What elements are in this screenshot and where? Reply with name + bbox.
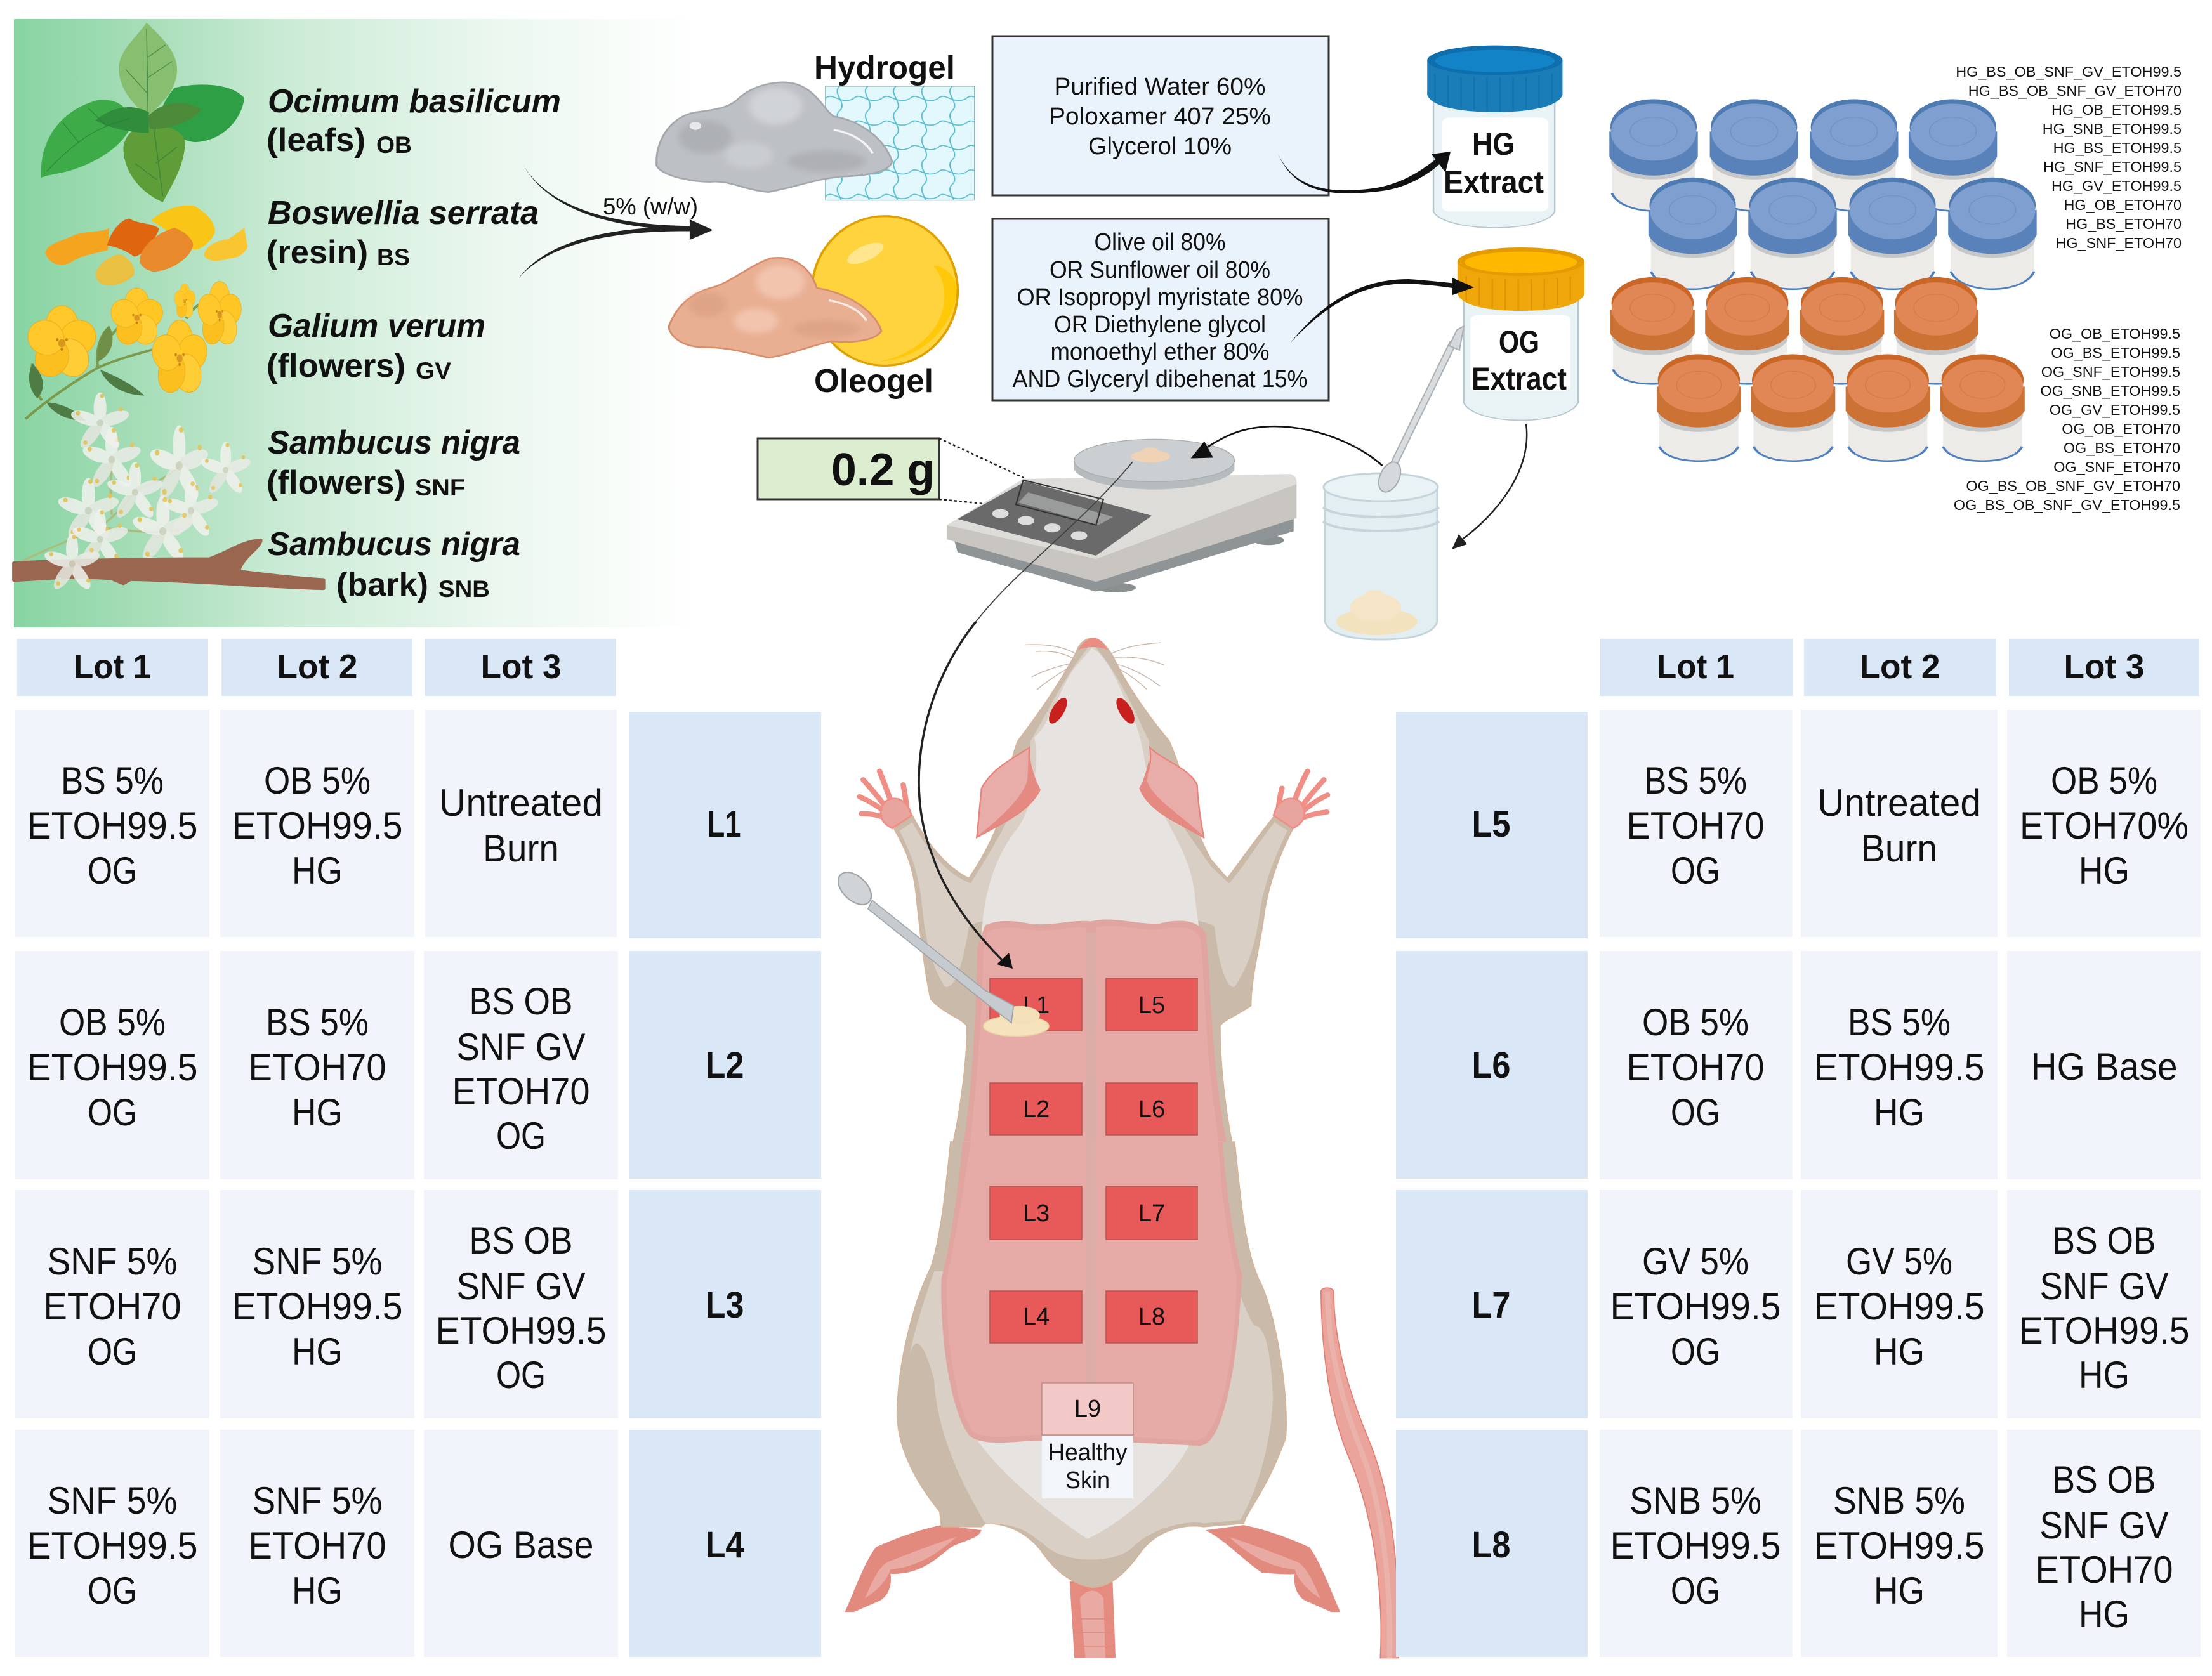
panel: plant sources gradient background	[14, 19, 699, 627]
text list: oleogel formulation codes: OG_BS_ETOH70	[2064, 440, 2180, 456]
header row right: Lot 2	[1859, 648, 1940, 686]
panel: oleogel composition box: OR Diethylene glycol	[1054, 311, 1266, 338]
header row left: Lot 3	[481, 648, 561, 686]
text list: hydrogel formulation codes: HG_SNF_ETOH70	[2056, 235, 2182, 251]
healthy skin site L9: Healthy	[1048, 1439, 1127, 1466]
row L6 right	[1396, 951, 2201, 1179]
arrow: OG jar to small jar	[1452, 424, 1527, 549]
row L4 left: OG Base	[448, 1524, 594, 1566]
site squares L1 to L8: L4	[1023, 1304, 1050, 1330]
row L8 right: ETOH99.5	[1610, 1524, 1781, 1567]
arrow: balance to rat L1 site	[919, 462, 1133, 969]
site squares L1 to L8	[990, 978, 1197, 1343]
label: Ocimum basilicum: (leafs)	[267, 122, 365, 159]
text list: oleogel formulation codes	[1954, 325, 2180, 513]
text list: hydrogel formulation codes: HG_BS_ETOH99.5	[2053, 140, 2182, 156]
row L1 left: Burn	[483, 827, 559, 870]
site squares L1 to L8: L7	[1138, 1200, 1165, 1227]
site squares L1 to L8: L2	[1023, 1096, 1050, 1123]
spatula and cream on L1	[832, 867, 1049, 1037]
row L6 right: HG	[1874, 1091, 1925, 1134]
icon: oleogel blob and oil drop	[669, 216, 958, 365]
healthy skin site L9	[1042, 1383, 1133, 1498]
label: Sambucus nigra flowers	[267, 424, 520, 501]
row L2 left: HG	[292, 1091, 343, 1134]
icon: HG extract jar: HG	[1472, 126, 1515, 162]
row L5 right: L5	[1472, 804, 1510, 845]
rat upper divider	[1086, 933, 1096, 1155]
row L3 left: SNF 5%	[253, 1240, 382, 1283]
row L5 right: Untreated	[1817, 782, 1981, 824]
row L3 left: BS OB	[470, 1219, 572, 1262]
row L5 right: ETOH70%	[2020, 804, 2189, 847]
row L5 right: HG	[2079, 849, 2130, 892]
label: Ocimum basilicum: OB	[376, 132, 412, 158]
row L3 left: OG	[88, 1330, 137, 1373]
row L6 right: BS 5%	[1848, 1001, 1951, 1044]
tail segment on the right	[1321, 1288, 1399, 1658]
label: Galium verum: Galium verum	[268, 308, 485, 344]
row L3 left: OG	[496, 1354, 546, 1396]
icon: sambucus nigra flowers	[14, 393, 252, 568]
text list: hydrogel formulation codes: HG_OB_ETOH99.5	[2051, 101, 2182, 118]
text list: hydrogel formulation codes: HG_GV_ETOH99.5	[2051, 178, 2182, 194]
row L7 right: OG	[1671, 1330, 1720, 1373]
label: Boswellia serrata: BS	[377, 244, 410, 270]
row L1 left: ETOH99.5	[27, 804, 198, 847]
row L8 right	[1396, 1430, 2201, 1657]
row L6 right: OB 5%	[1642, 1001, 1749, 1044]
site squares L1 to L8: L8	[1138, 1304, 1165, 1330]
label: Ocimum basilicum	[267, 83, 561, 159]
arrow: oleogel box to OG jar	[1290, 278, 1474, 343]
row L2 left: L2	[706, 1045, 744, 1086]
row L6 right: L6	[1472, 1045, 1510, 1086]
label: Boswellia serrata: Boswellia serrata	[268, 195, 539, 232]
row L2 left	[15, 951, 821, 1179]
label: Boswellia serrata: (resin)	[267, 234, 368, 271]
panel: hydrogel composition box	[992, 36, 1329, 195]
row L1 left: OG	[88, 849, 137, 892]
site squares L1 to L8: L1	[1023, 992, 1050, 1019]
arrow: jar to balance plate	[1191, 426, 1383, 466]
label: Galium verum: (flowers)	[267, 348, 405, 384]
icon: OG extract jar	[1458, 247, 1584, 420]
row L7 right: ETOH99.5	[1814, 1285, 1985, 1328]
row L4 left: ETOH99.5	[27, 1524, 198, 1567]
row L3 left	[15, 1190, 821, 1418]
panel: hydrogel composition box: Purified Water 60%	[1055, 74, 1265, 100]
text list: oleogel formulation codes: OG_OB_ETOH70	[2062, 421, 2180, 437]
row L8 right: HG	[2079, 1593, 2130, 1635]
panel: hydrogel composition box: Glycerol 10%	[1088, 133, 1232, 160]
row L4 left: OG	[88, 1569, 137, 1612]
header row right	[1600, 639, 2199, 696]
callout: 0.2 g readout	[758, 438, 1024, 507]
row L3 left: HG	[292, 1330, 343, 1373]
icon: HG extract jar	[1427, 46, 1562, 228]
icon: basil leaves	[41, 22, 244, 202]
row L8 right: SNB 5%	[1629, 1479, 1761, 1522]
icon: spatula in jar	[1374, 326, 1464, 495]
heading: Hydrogel: Hydrogel	[814, 49, 955, 86]
illustration: rat with labelled skin sites	[832, 638, 1399, 1658]
row L2 left: SNF GV	[457, 1026, 585, 1068]
label: Galium verum: GV	[416, 358, 451, 384]
row L5 right	[1396, 710, 2201, 938]
table: left lots and sites	[15, 639, 821, 1657]
rat lower body	[845, 1142, 1340, 1658]
site squares L1 to L8: L5	[1138, 992, 1165, 1019]
arrow: plant extracts 5% w/w into gels	[519, 166, 713, 278]
row L3 left: SNF GV	[457, 1265, 585, 1307]
row L1 left: OB 5%	[264, 759, 371, 802]
row L3 left: ETOH70	[43, 1285, 181, 1328]
row L8 right: BS OB	[2052, 1458, 2156, 1501]
healthy skin site L9: L9	[1074, 1396, 1101, 1422]
row L7 right: GV 5%	[1642, 1240, 1749, 1283]
header row right: Lot 1	[1657, 648, 1734, 686]
row L2 left: BS OB	[470, 980, 572, 1023]
row L2 left: OG	[496, 1115, 546, 1157]
row L8 right: SNF GV	[2039, 1504, 2169, 1547]
icon: HG extract jar: Extract	[1444, 164, 1544, 200]
panel: oleogel composition box: Olive oil 80%	[1094, 229, 1226, 256]
row L3 left: ETOH99.5	[435, 1309, 607, 1352]
row L5 right: BS 5%	[1644, 759, 1747, 802]
text list: oleogel formulation codes: OG_BS_OB_SNF_GV_ETOH70	[1966, 478, 2180, 494]
row L8 right: SNB 5%	[1833, 1479, 1965, 1522]
text list: hydrogel formulation codes: HG_OB_ETOH70	[2064, 197, 2182, 213]
panel: oleogel composition box	[992, 219, 1329, 400]
row L3 left: SNF 5%	[47, 1240, 178, 1283]
label: Sambucus nigra bark: (bark)	[336, 566, 428, 603]
panel: oleogel composition box: OR Isopropyl myristate 80%	[1017, 284, 1303, 311]
text list: hydrogel formulation codes	[1956, 63, 2182, 251]
row L8 right: HG	[1874, 1569, 1925, 1612]
arrow: plant extracts 5% w/w into gels: 5% (w/w)	[603, 193, 698, 219]
row L1 left: HG	[292, 849, 343, 892]
row L1 left: ETOH99.5	[232, 804, 402, 847]
label: Boswellia serrata	[267, 195, 539, 271]
panel: oleogel composition box: OR Sunflower oil 80%	[1050, 257, 1270, 284]
callout: 0.2 g readout: 0.2 g	[831, 445, 935, 495]
row L6 right: ETOH70	[1627, 1046, 1764, 1089]
table: right lots and sites	[1396, 639, 2201, 1657]
row L7 right: GV 5%	[1846, 1240, 1952, 1283]
row L4 left: SNF 5%	[47, 1479, 178, 1522]
label: Sambucus nigra flowers: Sambucus nigra	[268, 424, 520, 461]
text list: oleogel formulation codes: OG_SNB_ETOH99.5	[2040, 383, 2180, 399]
text list: oleogel formulation codes: OG_OB_ETOH99.5	[2050, 325, 2180, 342]
text list: oleogel formulation codes: OG_GV_ETOH99.5	[2050, 402, 2180, 418]
icon: boswellia resin	[45, 206, 247, 285]
row L7 right	[1396, 1190, 2201, 1418]
icon: blue hydrogel vials	[1609, 99, 2037, 289]
row L4 left	[15, 1430, 821, 1657]
row L3 left: ETOH99.5	[232, 1285, 402, 1328]
icon: sambucus bark branch	[14, 534, 324, 592]
header row left: Lot 2	[277, 648, 358, 686]
arrow: hydrogel box to HG jar	[1278, 152, 1451, 193]
row L7 right: ETOH99.5	[2019, 1309, 2189, 1352]
text list: hydrogel formulation codes: HG_SNF_ETOH99.5	[2043, 159, 2182, 175]
icon: hydrogel blob and mesh	[657, 82, 975, 200]
row L7 right: SNF GV	[2039, 1265, 2169, 1307]
panel: hydrogel composition box: Poloxamer 407 25%	[1049, 103, 1271, 130]
text list: hydrogel formulation codes: HG_BS_OB_SNF_GV_ETOH99.5	[1956, 63, 2182, 80]
row L2 left: BS 5%	[266, 1001, 369, 1044]
label: Sambucus nigra flowers: (flowers)	[267, 464, 405, 501]
row L5 right: ETOH70	[1627, 804, 1764, 847]
row L2 left: ETOH70	[249, 1046, 386, 1089]
icon: galium verum flowers	[23, 282, 244, 421]
panel: oleogel composition box: AND Glyceryl dibehenat 15%	[1013, 366, 1307, 393]
panel: oleogel composition box: monoethyl ether 80%	[1051, 339, 1269, 365]
text list: oleogel formulation codes: OG_BS_OB_SNF_GV_ETOH99.5	[1954, 497, 2180, 513]
icon: analytical balance	[947, 439, 1297, 592]
row L4 left: L4	[706, 1524, 744, 1566]
row L4 left: HG	[292, 1569, 343, 1612]
icon: orange oleogel vials	[1610, 277, 2025, 461]
row L1 left: Untreated	[439, 782, 603, 824]
row L1 left: BS 5%	[61, 759, 164, 802]
label: Galium verum	[267, 308, 485, 384]
row L1 left: L1	[707, 804, 741, 845]
label: Ocimum basilicum: Ocimum basilicum	[268, 83, 561, 120]
row L7 right: HG	[1874, 1330, 1925, 1373]
label: Sambucus nigra bark: SNB	[438, 576, 490, 602]
icon: OG extract jar: Extract	[1471, 361, 1567, 396]
row L7 right: L7	[1472, 1285, 1510, 1326]
text list: hydrogel formulation codes: HG_BS_ETOH70	[2065, 216, 2182, 232]
label: Sambucus nigra bark	[268, 526, 520, 603]
rat upper body	[860, 638, 1327, 1155]
row L2 left: ETOH70	[452, 1070, 590, 1113]
row L4 left: ETOH70	[249, 1524, 386, 1567]
text list: oleogel formulation codes: OG_SNF_ETOH70	[2053, 459, 2180, 475]
site squares L1 to L8: L3	[1023, 1200, 1050, 1227]
icon: small jar with cream	[1323, 473, 1439, 639]
text list: hydrogel formulation codes: HG_SNB_ETOH99.5	[2043, 121, 2182, 137]
row L1 left	[15, 710, 821, 938]
header row right: Lot 3	[2064, 648, 2145, 686]
row L5 right: Burn	[1861, 827, 1937, 870]
label: Sambucus nigra bark: Sambucus nigra	[268, 526, 520, 563]
row L8 right: ETOH70	[2036, 1548, 2173, 1591]
icon: OG extract jar: OG	[1499, 324, 1539, 360]
header row left: Lot 1	[74, 648, 151, 686]
row L4 left: SNF 5%	[253, 1479, 382, 1522]
healthy skin site L9: Skin	[1065, 1467, 1110, 1494]
row L2 left: OB 5%	[59, 1001, 166, 1044]
text list: hydrogel formulation codes: HG_BS_OB_SNF_GV_ETOH70	[1968, 82, 2182, 99]
row L6 right: HG Base	[2031, 1045, 2178, 1088]
row L5 right: OG	[1671, 849, 1720, 892]
site squares L1 to L8: L6	[1138, 1096, 1165, 1123]
row L2 left: OG	[88, 1091, 137, 1134]
row L5 right: OB 5%	[2051, 759, 2157, 802]
row L6 right: ETOH99.5	[1814, 1046, 1985, 1089]
row L7 right: ETOH99.5	[1610, 1285, 1781, 1328]
row L8 right: L8	[1472, 1524, 1510, 1566]
text list: oleogel formulation codes: OG_SNF_ETOH99.5	[2041, 363, 2180, 380]
row L7 right: HG	[2079, 1354, 2130, 1396]
row L7 right: BS OB	[2052, 1219, 2156, 1262]
row L3 left: L3	[706, 1285, 744, 1326]
text list: oleogel formulation codes: OG_BS_ETOH99.5	[2051, 344, 2180, 361]
row L6 right: OG	[1671, 1091, 1720, 1134]
heading: Oleogel: Oleogel	[814, 363, 933, 400]
row L2 left: ETOH99.5	[27, 1046, 198, 1089]
row L8 right: OG	[1671, 1569, 1720, 1612]
header row left	[17, 639, 616, 696]
label: Sambucus nigra flowers: SNF	[415, 475, 465, 501]
row L8 right: ETOH99.5	[1814, 1524, 1985, 1567]
